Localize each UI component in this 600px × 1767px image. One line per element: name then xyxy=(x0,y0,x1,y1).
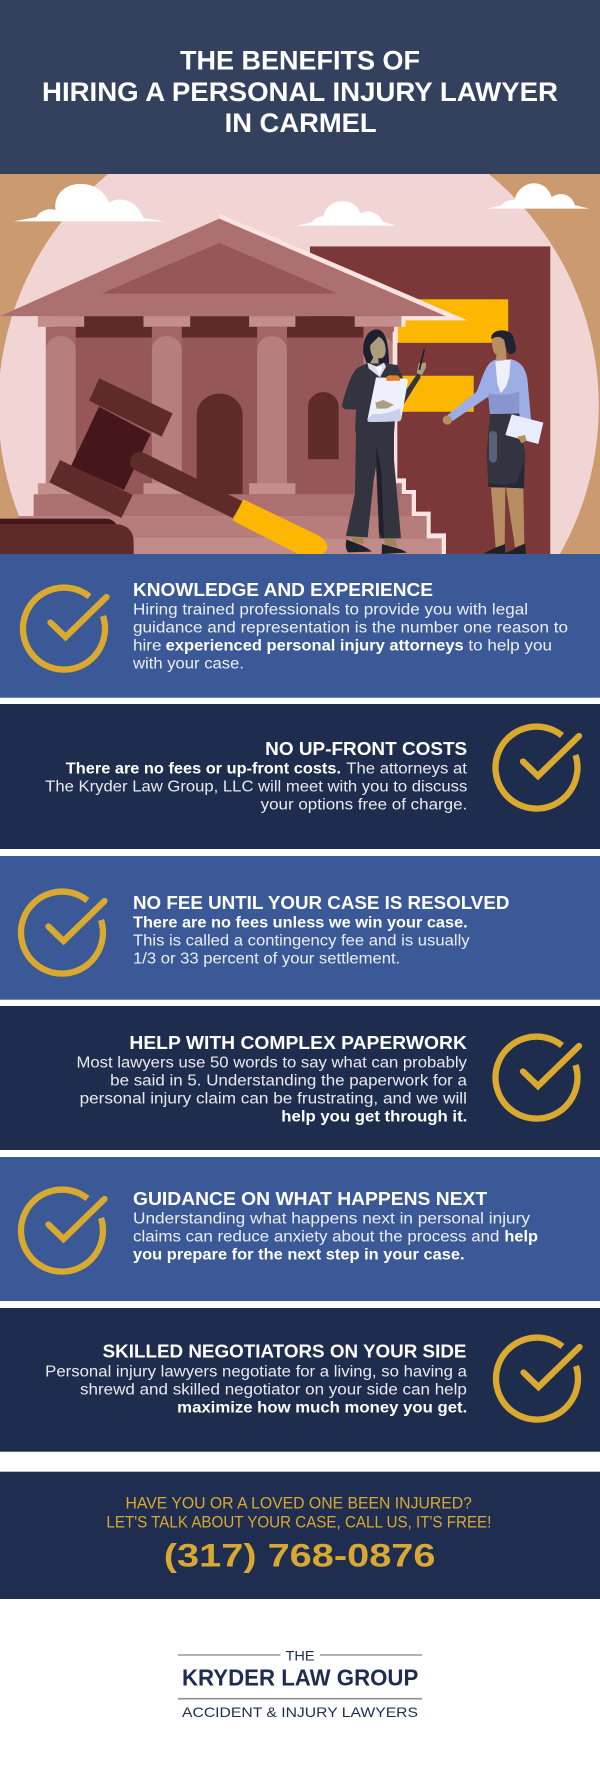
body text xyxy=(133,1210,538,1263)
heading: SKILLED NEGOTIATORS ON YOUR SIDE xyxy=(103,1341,466,1362)
body text xyxy=(76,1054,467,1125)
title banner: THE BENEFITS OF xyxy=(180,46,420,76)
body text xyxy=(133,914,470,967)
heading: GUIDANCE ON WHAT HAPPENS NEXT xyxy=(133,1188,488,1209)
heading: KNOWLEDGE AND EXPERIENCE xyxy=(133,579,433,600)
title banner: HIRING A PERSONAL INJURY LAWYER xyxy=(42,77,558,107)
stairs edge xyxy=(372,332,446,554)
body text: Hiring trained professionals to provide you with legal xyxy=(133,601,528,618)
icon: clouds xyxy=(13,183,589,226)
body text: to help you xyxy=(468,637,552,654)
panel: no up-front costs xyxy=(0,704,600,849)
body text: There are no fees unless we win your case. xyxy=(133,914,468,931)
courthouse xyxy=(0,214,468,556)
icon: check circle xyxy=(21,892,104,974)
panel: no fee until your case is resolved xyxy=(0,856,600,1000)
call to action text: HAVE YOU OR A LOVED ONE BEEN INJURED? xyxy=(126,1495,472,1513)
body text: help xyxy=(504,1228,538,1245)
icon: check circle xyxy=(496,1338,580,1420)
logo: The Kryder Law Group: THE xyxy=(286,1648,315,1664)
body text: help you get through it. xyxy=(281,1108,467,1125)
heading: HELP WITH COMPLEX PAPERWORK xyxy=(129,1032,468,1053)
logo: The Kryder Law Group xyxy=(178,1648,422,1720)
panel: help with complex paperwork xyxy=(0,1006,600,1150)
body text: personal injury claim can be frustrating, and we will xyxy=(80,1090,467,1107)
call to action text xyxy=(106,1495,491,1532)
title banner xyxy=(0,0,600,174)
body text: with your case. xyxy=(132,655,244,672)
body text: claims can reduce anxiety about the process and xyxy=(133,1228,499,1245)
back building with windows xyxy=(310,246,550,557)
body text: be said in 5. Understanding the paperwork for a xyxy=(110,1072,467,1089)
title banner: IN CARMEL xyxy=(225,108,377,138)
body text: experienced personal injury attorneys xyxy=(166,637,464,654)
body text: guidance and representation is the number one reason to xyxy=(133,619,568,636)
icon: check circle xyxy=(21,1190,104,1272)
body text: Understanding what happens next in personal injury xyxy=(133,1210,530,1227)
body text: The Kryder Law Group, LLC will meet with you to discuss xyxy=(45,778,468,795)
logo: The Kryder Law Group: KRYDER LAW GROUP xyxy=(182,1664,418,1690)
body text xyxy=(45,760,468,813)
body text: maximize how much money you get. xyxy=(177,1399,467,1416)
body text: your options free of charge. xyxy=(261,796,467,813)
phone number: (317) 768-0876 xyxy=(164,1538,436,1574)
figure: client in blue blouse with document xyxy=(443,330,543,554)
heading: NO FEE UNTIL YOUR CASE IS RESOLVED xyxy=(133,892,509,913)
body text: 1/3 or 33 percent of your settlement. xyxy=(133,950,400,967)
panel: guidance on what happens next xyxy=(0,1157,600,1301)
heading: NO UP-FRONT COSTS xyxy=(265,738,467,759)
body text: There are no fees or up-front costs. xyxy=(66,760,341,777)
body text: shrewd and skilled negotiator on your side can help xyxy=(80,1381,467,1398)
body text: This is called a contingency fee and is usually xyxy=(133,932,470,949)
icon: gavel xyxy=(0,378,327,555)
call to action panel xyxy=(0,1472,600,1599)
icon: check circle xyxy=(495,1037,579,1119)
panel: knowledge and experience xyxy=(0,554,600,698)
illustration: courthouse with lawyers and gavel xyxy=(0,174,600,554)
call to action text: LET'S TALK ABOUT YOUR CASE, CALL US, IT'S FREE! xyxy=(106,1514,491,1532)
panel: skilled negotiators on your side xyxy=(0,1308,600,1452)
icon: check circle xyxy=(23,588,106,670)
body text: you prepare for the next step in your case. xyxy=(133,1246,465,1263)
figure: lawyer in dark suit with clipboard xyxy=(342,329,426,554)
body text: The attorneys at xyxy=(346,760,468,777)
body text: Most lawyers use 50 words to say what can probably xyxy=(76,1054,467,1071)
body text: Personal injury lawyers negotiate for a living, so having a xyxy=(45,1363,467,1380)
logo: The Kryder Law Group: ACCIDENT & INJURY LAWYERS xyxy=(182,1704,418,1720)
icon: check circle xyxy=(495,727,579,809)
body text xyxy=(45,1363,467,1416)
body text: hire xyxy=(133,637,162,654)
body text xyxy=(132,601,568,672)
